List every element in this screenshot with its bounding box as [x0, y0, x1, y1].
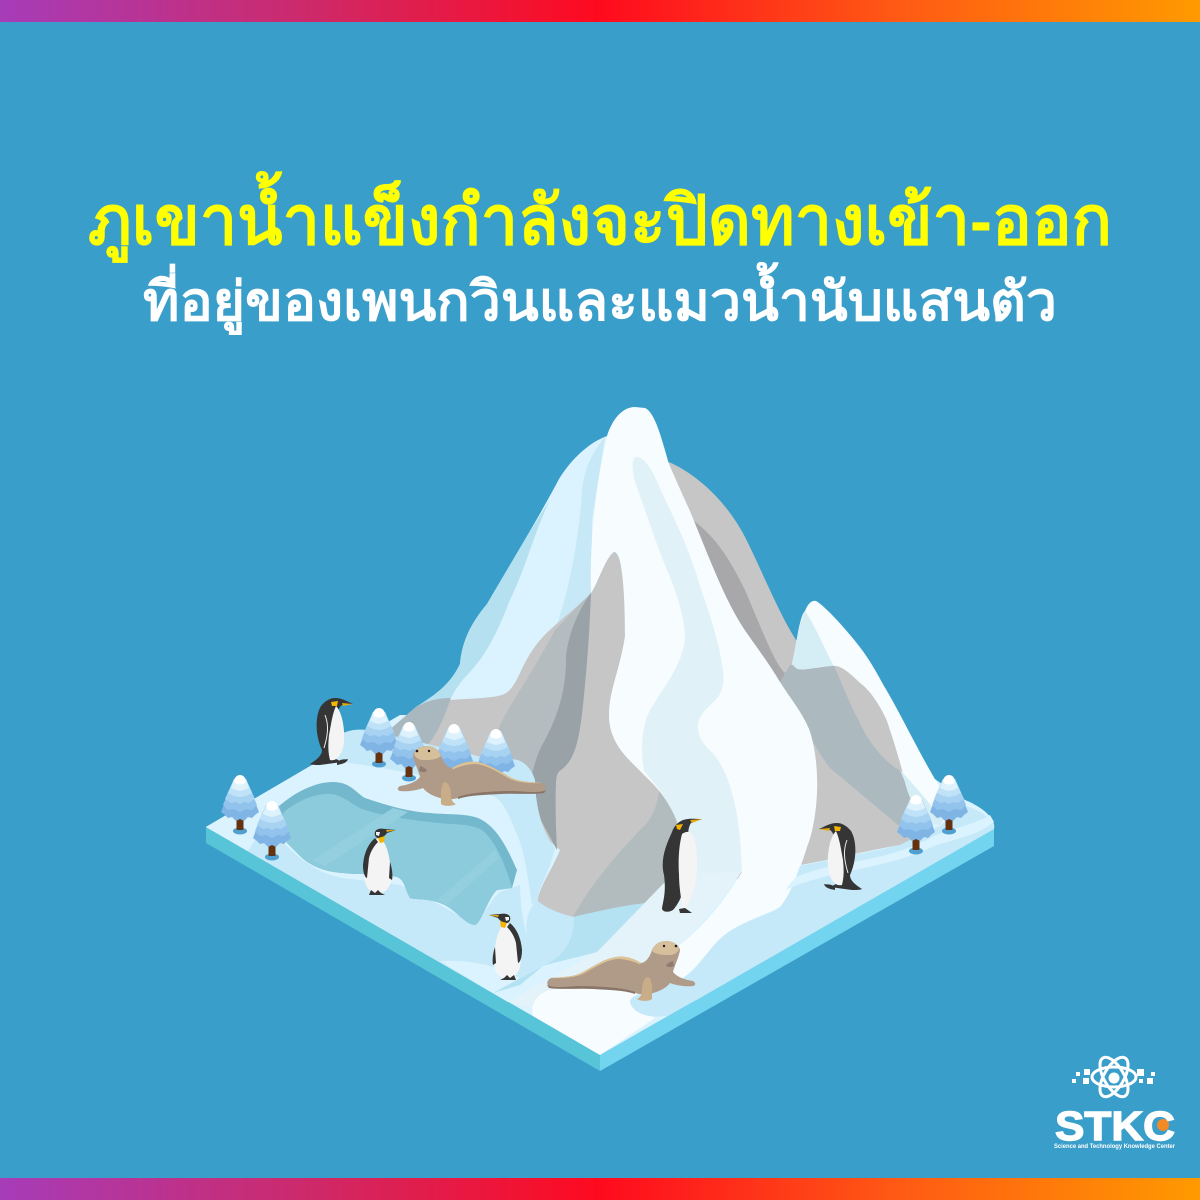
tree — [477, 729, 515, 788]
blue shade under rock — [493, 884, 663, 993]
right ice light band — [785, 815, 994, 890]
logo: STKC — [1054, 1053, 1176, 1150]
seal upper — [398, 746, 546, 806]
grey-blue rock band right — [780, 665, 940, 825]
logo atom icon — [1092, 1053, 1136, 1101]
pale ice ribbon — [508, 868, 744, 1010]
logo orange dot — [1157, 1119, 1169, 1131]
ice slab top — [206, 715, 994, 1055]
lower left ice — [206, 798, 543, 993]
right peak pale shade — [792, 611, 944, 826]
penguin back left — [310, 698, 353, 765]
back grey mountain — [560, 462, 935, 900]
dark grey rock band right — [694, 521, 785, 684]
bottom gradient bar — [0, 1178, 1200, 1200]
snow ribbon — [632, 457, 742, 874]
dark rock band — [528, 593, 591, 850]
pond reflections — [313, 808, 499, 905]
title line 2: ที่อยู่ของเพนกวินและแมวน้ำนับแสนตัว — [143, 262, 1057, 335]
seal lower — [547, 941, 695, 1001]
arc shade beside rock — [526, 900, 574, 966]
penguin front lower — [489, 914, 522, 980]
illustration: iceberg island — [206, 407, 994, 1071]
tree — [253, 801, 291, 860]
grey-blue rock left — [387, 698, 451, 765]
tree — [435, 724, 473, 784]
logo tagline: Science and Technology Knowledge Center — [1054, 1144, 1176, 1150]
right ice foreground — [630, 805, 994, 1017]
tree — [897, 795, 935, 854]
tree — [390, 722, 428, 782]
tree — [930, 775, 968, 834]
title line 1: ภูเขาน้ำแข็งกำลังจะปิดทางเข้า-ออก — [88, 170, 1112, 264]
trees right — [897, 775, 968, 854]
top gradient bar — [0, 0, 1200, 22]
logo pixel squares — [1072, 1069, 1155, 1084]
title — [88, 170, 1112, 335]
right small peak — [792, 601, 960, 826]
front grey rock — [387, 552, 680, 917]
left snow shade outer — [416, 500, 550, 707]
tall penguin — [662, 819, 702, 913]
logo wordmark: STKC — [1055, 1103, 1175, 1149]
hump ice left — [206, 730, 597, 1002]
left snow slope — [387, 436, 610, 760]
trees left — [221, 708, 515, 860]
ice slab left side — [206, 827, 600, 1071]
pond water — [283, 794, 512, 925]
left snow shade inner — [555, 437, 605, 630]
grey mid shade — [480, 593, 591, 800]
main white snow — [532, 407, 817, 1055]
hump ice top band — [335, 730, 555, 905]
penguin back right — [819, 823, 862, 890]
pond — [278, 782, 517, 925]
ice slab right side — [600, 829, 994, 1071]
penguin front on ice — [363, 829, 396, 895]
front light ice patch — [440, 961, 522, 1002]
pond rim — [278, 782, 517, 925]
grey lower shade — [573, 780, 680, 917]
tree — [360, 708, 398, 768]
tree — [221, 775, 259, 834]
